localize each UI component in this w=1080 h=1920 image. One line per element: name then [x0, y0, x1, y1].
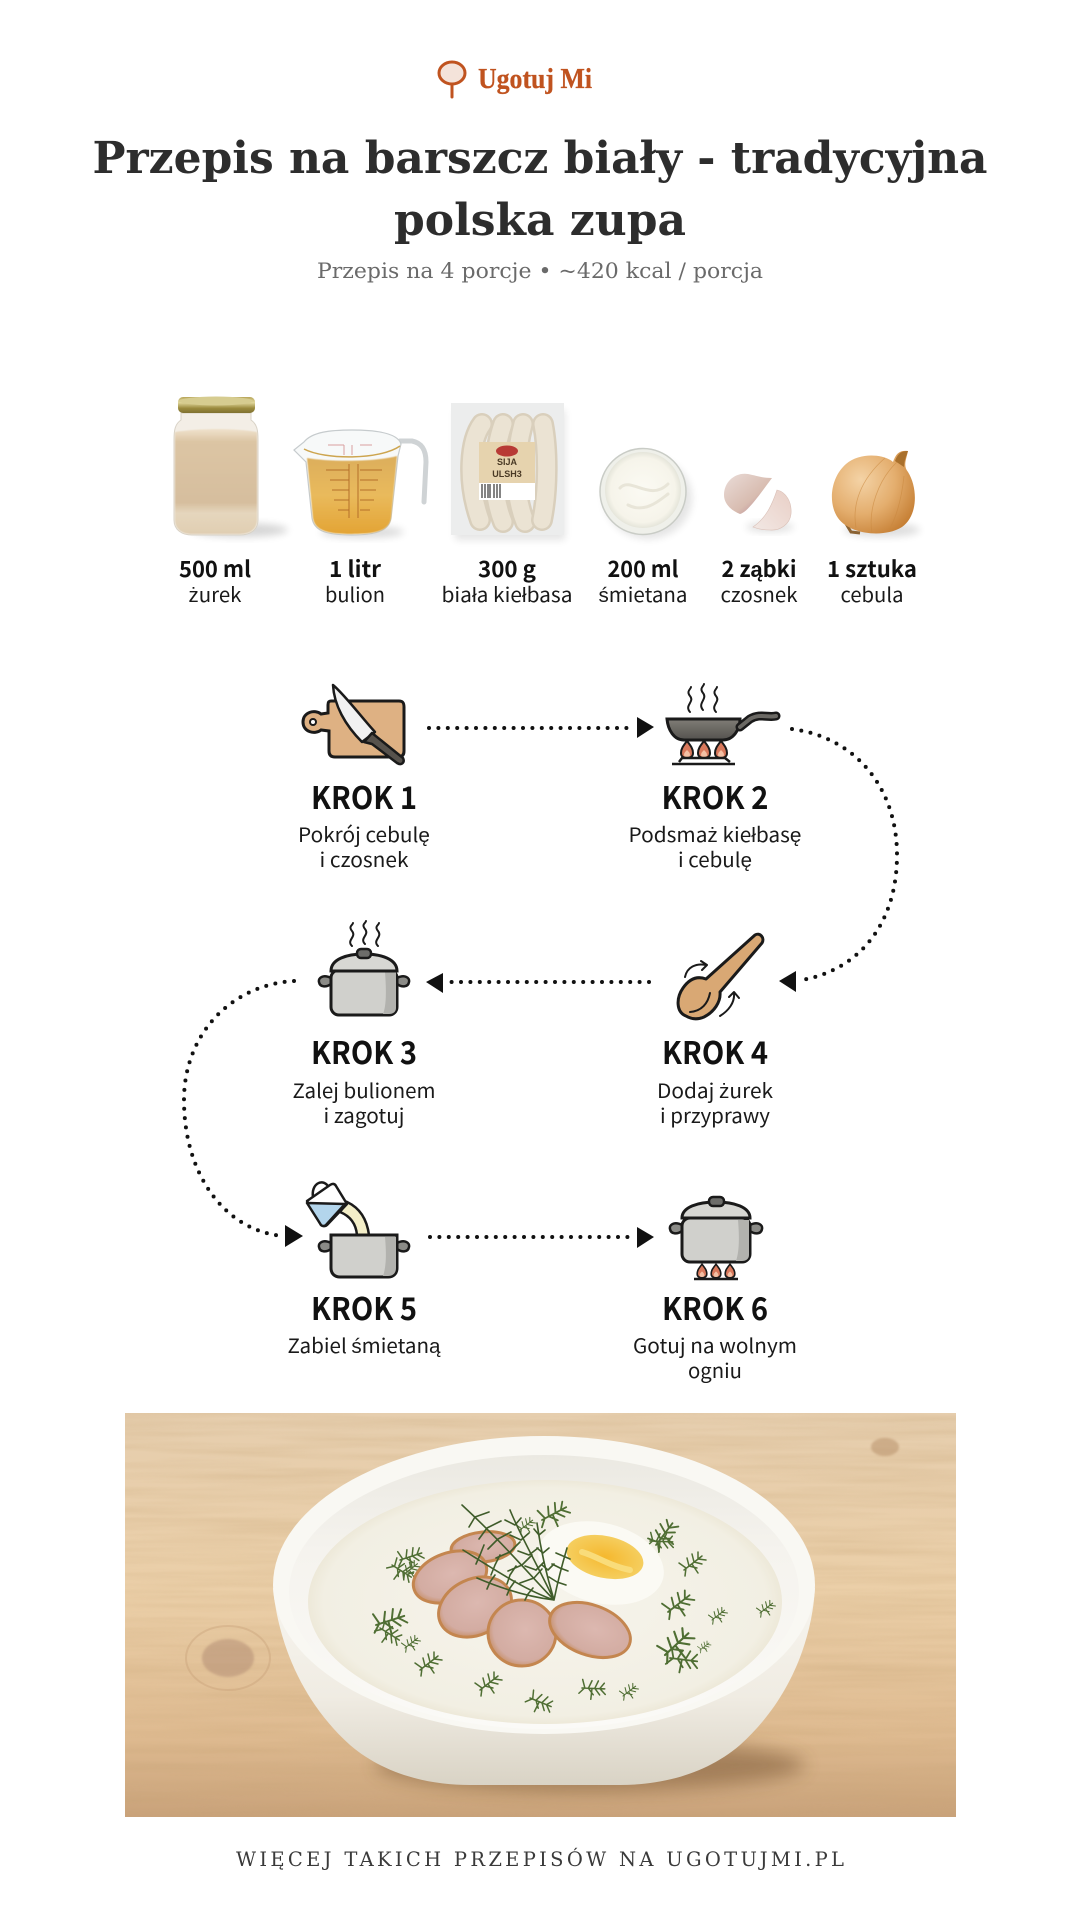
step 2 text: Podsmaż kiełbasę — [628, 819, 802, 848]
ingredient labels: 300 g — [478, 552, 537, 584]
ingredient: jar of żurek — [174, 396, 288, 537]
ingredient labels: 2 ząbki — [722, 552, 796, 584]
title: polska zupa — [394, 195, 686, 246]
bowl — [273, 1436, 815, 1791]
step 2 text — [628, 773, 802, 873]
ingredient labels: śmietana — [598, 579, 688, 608]
ingredient: onion — [832, 451, 920, 537]
ingredient labels: czosnek — [720, 579, 798, 608]
logo: Ugotuj Mi — [439, 62, 592, 97]
ingredient labels: bulion — [325, 579, 385, 608]
ingredient: white sausage pack — [451, 403, 565, 540]
step 4 text: Dodaj żurek — [657, 1075, 773, 1104]
step 1 text: KROK 1 — [311, 773, 417, 818]
icon: jug pouring cream into pot — [307, 1182, 409, 1277]
step 6 text: Gotuj na wolnym — [633, 1330, 797, 1359]
step 6 text: KROK 6 — [662, 1284, 768, 1329]
ingredient labels: cebula — [840, 579, 904, 608]
ingredient: white sausage pack: SIJA — [497, 457, 518, 467]
sausage slices — [406, 1529, 638, 1668]
ingredient: measuring jug of broth — [294, 430, 426, 538]
dill flecks — [367, 1498, 775, 1720]
footer: WIĘCEJ TAKICH PRZEPISÓW NA UGOTUJMI.PL — [236, 1846, 846, 1871]
arrow: step 3 to 5 — [184, 981, 303, 1247]
ingredient labels — [179, 552, 917, 608]
step 2 text: i cebulę — [678, 844, 752, 873]
ingredient labels: żurek — [188, 579, 242, 608]
step 3 text: i zagotuj — [324, 1100, 404, 1129]
ingredient labels: biała kiełbasa — [442, 579, 572, 608]
step 4 text: i przyprawy — [660, 1100, 771, 1129]
ingredient: white sausage pack: ULSH3 — [492, 469, 522, 479]
step 3 text: KROK 3 — [311, 1028, 417, 1073]
step 4 text — [657, 1028, 773, 1129]
step 2 text: KROK 2 — [662, 773, 768, 818]
icon: cutting board and knife — [303, 685, 404, 764]
step 5 text — [288, 1284, 441, 1359]
photo: bowl of white borscht on wooden table — [125, 1413, 956, 1817]
boiled egg — [529, 1509, 673, 1617]
arrow: step 1 to 2 — [429, 717, 654, 738]
step 3 text: Zalej bulionem — [292, 1075, 436, 1104]
ingredient labels: 1 sztuka — [827, 552, 917, 584]
subtitle: Przepis na 4 porcje • ~420 kcal / porcja — [317, 259, 763, 284]
ingredient: bowl of cream — [600, 448, 692, 539]
ingredient labels: 500 ml — [179, 552, 251, 584]
logo: Ugotuj Mi: Ugotuj Mi — [478, 63, 592, 95]
step 5 text: KROK 5 — [311, 1284, 417, 1329]
step 1 text — [298, 773, 430, 873]
step 5 text: Zabiel śmietaną — [288, 1330, 441, 1359]
dill sprig — [462, 1505, 570, 1600]
title — [92, 133, 988, 246]
ingredient labels: 1 litr — [329, 552, 381, 584]
step 6 text — [633, 1284, 797, 1384]
icon: steaming pot — [319, 921, 409, 1015]
step 6 text: ogniu — [688, 1355, 742, 1384]
icon: pot on low flame — [670, 1197, 762, 1279]
icon: frying pan on burner — [667, 684, 776, 764]
arrow: step 2 to 4 — [779, 729, 897, 992]
step 3 text — [292, 1028, 436, 1129]
panel: steps — [184, 684, 897, 1384]
ingredient: garlic cloves — [724, 474, 794, 532]
arrow: step 5 to 6 — [430, 1227, 654, 1248]
title: Przepis na barszcz biały - tradycyjna — [92, 133, 988, 184]
step 4 text: KROK 4 — [662, 1028, 768, 1073]
step 1 text: Pokrój cebulę — [298, 819, 430, 848]
ingredient labels: 200 ml — [608, 552, 678, 584]
icon: wooden spoon with stirring arrows — [678, 934, 763, 1019]
arrow: step 4 to 3 — [426, 973, 649, 993]
panel: ingredients — [174, 396, 920, 608]
wooden table — [125, 1413, 956, 1817]
step 1 text: i czosnek — [320, 844, 408, 873]
